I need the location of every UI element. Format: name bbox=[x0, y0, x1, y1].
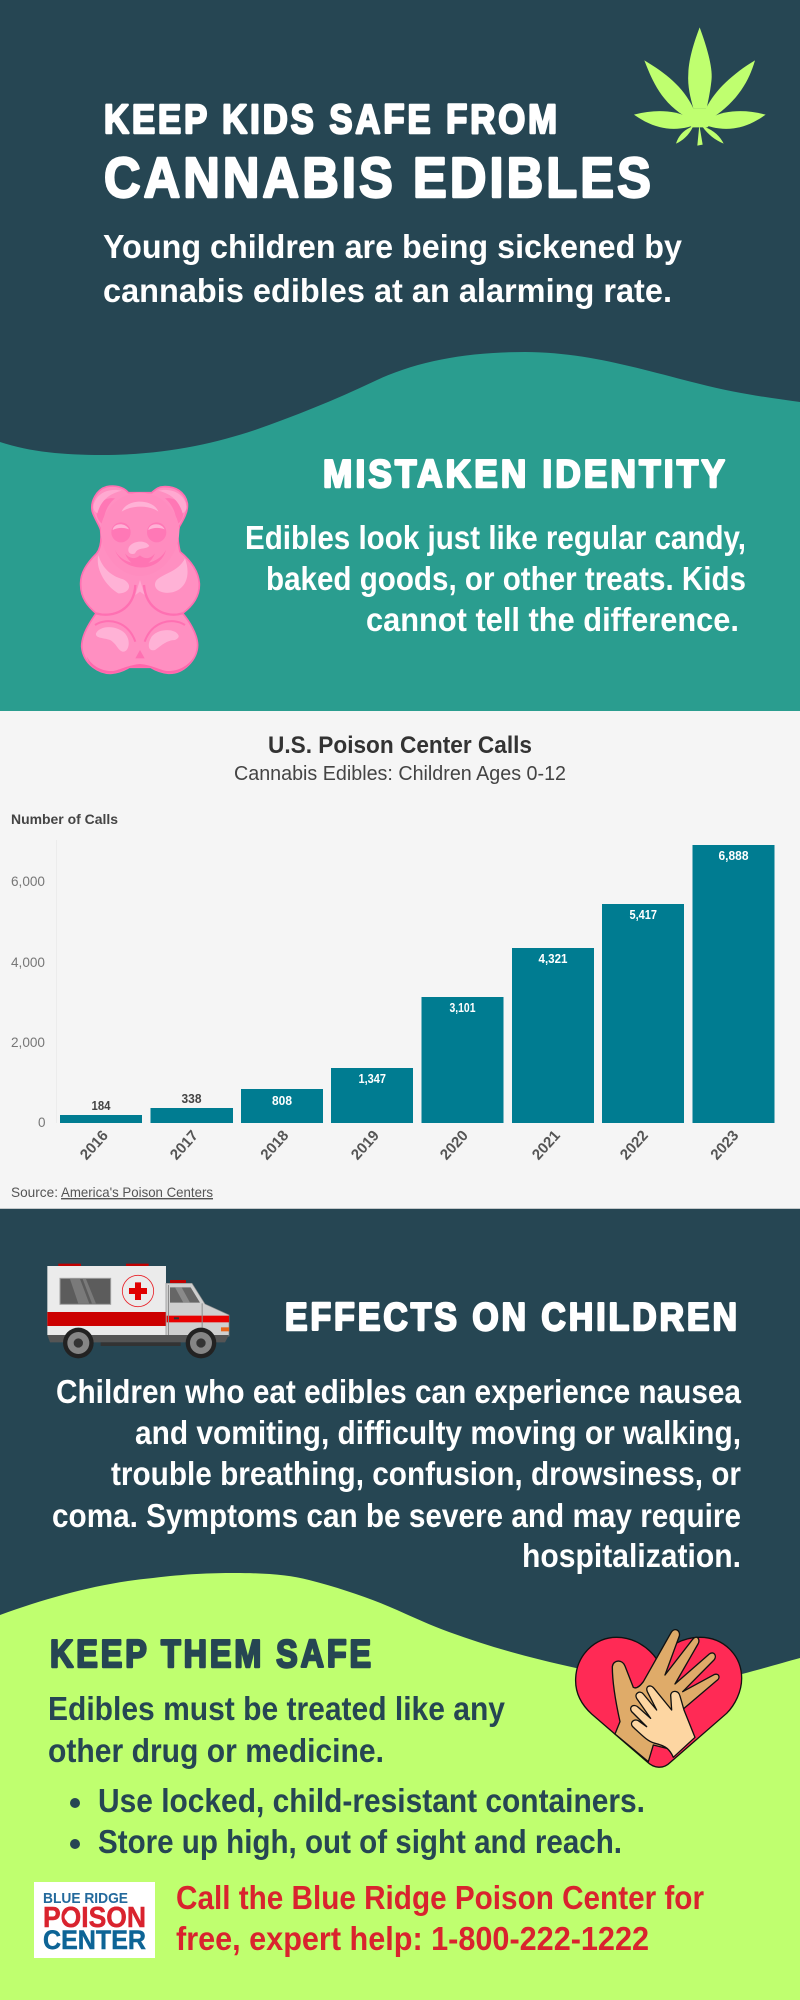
bar value labels: 338 bbox=[182, 1091, 202, 1106]
y axis labels: 4,000 bbox=[11, 954, 45, 970]
body text: cannot tell the difference. bbox=[366, 601, 739, 638]
teal wave background bbox=[0, 352, 800, 711]
x axis year labels: 2023 bbox=[707, 1127, 742, 1163]
y axis labels: 2,000 bbox=[11, 1034, 45, 1050]
panel: header bbox=[103, 27, 766, 309]
body text: hospitalization. bbox=[522, 1537, 741, 1574]
chart title: U.S. Poison Center Calls bbox=[268, 732, 532, 759]
intro text bbox=[103, 228, 683, 309]
body text: other drug or medicine. bbox=[48, 1732, 384, 1769]
x axis year labels: 2016 bbox=[77, 1127, 112, 1163]
heading: effects on children: EFFECTS ON CHILDREN bbox=[285, 1296, 740, 1339]
bar value labels bbox=[92, 848, 748, 1113]
bar value labels: 4,321 bbox=[538, 951, 568, 966]
body text: Edibles must be treated like any bbox=[48, 1690, 506, 1727]
title line 1: KEEP KIDS SAFE FROM bbox=[104, 96, 560, 142]
body text bbox=[245, 519, 746, 638]
heading: keep them safe: KEEP THEM SAFE bbox=[50, 1633, 374, 1676]
body text: Children who eat edibles can experience nausea bbox=[56, 1373, 742, 1410]
lime wave background bbox=[0, 1573, 800, 2000]
bar value labels: 184 bbox=[92, 1098, 111, 1113]
title line 2: CANNABIS EDIBLES bbox=[104, 146, 654, 210]
chart subtitle: Cannabis Edibles: Children Ages 0-12 bbox=[234, 763, 566, 785]
body text: trouble breathing, confusion, drowsiness, or bbox=[111, 1455, 741, 1492]
safety tips list bbox=[70, 1782, 645, 1860]
bar value labels: 6,888 bbox=[718, 848, 748, 863]
bar value labels: 3,101 bbox=[450, 1000, 476, 1015]
safety tips list: Store up high, out of sight and reach. bbox=[98, 1823, 622, 1860]
panel: bar chart section bbox=[0, 711, 800, 1209]
intro text: cannabis edibles at an alarming rate. bbox=[103, 272, 672, 309]
icon: gummy bear bbox=[81, 486, 199, 673]
source note: Source: bbox=[11, 1184, 58, 1200]
intro text: Young children are being sickened by bbox=[103, 228, 683, 265]
logo: blue ridge poison center: CENTER bbox=[43, 1925, 146, 1955]
source note: America's Poison Centers bbox=[61, 1184, 213, 1200]
icon: hands in heart bbox=[576, 1630, 742, 1767]
heading: mistaken identity: MISTAKEN IDENTITY bbox=[323, 453, 728, 496]
x axis year labels: 2017 bbox=[167, 1127, 202, 1163]
icon: ambulance bbox=[47, 1264, 229, 1358]
bar value labels: 808 bbox=[272, 1093, 292, 1108]
y axis labels bbox=[11, 873, 46, 1130]
safety tips list: Use locked, child-resistant containers. bbox=[98, 1782, 645, 1819]
x axis year labels bbox=[77, 1127, 742, 1163]
x axis year labels: 2022 bbox=[617, 1127, 652, 1163]
logo: blue ridge poison center: BLUE RIDGE bbox=[43, 1890, 128, 1907]
call to action bbox=[176, 1879, 704, 1957]
body text bbox=[52, 1373, 742, 1574]
body text: Edibles look just like regular candy, bbox=[245, 519, 746, 556]
bars bbox=[60, 845, 774, 1123]
x axis year labels: 2020 bbox=[437, 1127, 472, 1163]
logo: blue ridge poison center: POISON bbox=[43, 1902, 146, 1934]
bar value labels: 5,417 bbox=[630, 907, 657, 922]
x axis year labels: 2019 bbox=[348, 1127, 383, 1163]
body text bbox=[48, 1690, 506, 1769]
panel: effects on children bbox=[0, 1209, 800, 1709]
call to action: Call the Blue Ridge Poison Center for bbox=[176, 1879, 704, 1916]
y axis labels: 6,000 bbox=[11, 873, 45, 889]
bar value labels: 1,347 bbox=[358, 1071, 386, 1086]
logo: blue ridge poison center bbox=[34, 1882, 155, 1958]
panel: keep them safe bbox=[0, 1573, 800, 2000]
y axis labels: 0 bbox=[38, 1114, 46, 1130]
body text: baked goods, or other treats. Kids bbox=[266, 560, 746, 597]
axis title: Number of Calls bbox=[11, 811, 118, 827]
body text: coma. Symptoms can be severe and may require bbox=[52, 1497, 741, 1534]
body text: and vomiting, difficulty moving or walking, bbox=[135, 1414, 741, 1451]
x axis year labels: 2021 bbox=[529, 1127, 564, 1163]
panel: mistaken identity bbox=[0, 352, 800, 711]
x axis year labels: 2018 bbox=[257, 1127, 292, 1163]
call to action: free, expert help: 1-800-222-1222 bbox=[176, 1920, 649, 1957]
icon: cannabis leaf bbox=[634, 27, 766, 146]
